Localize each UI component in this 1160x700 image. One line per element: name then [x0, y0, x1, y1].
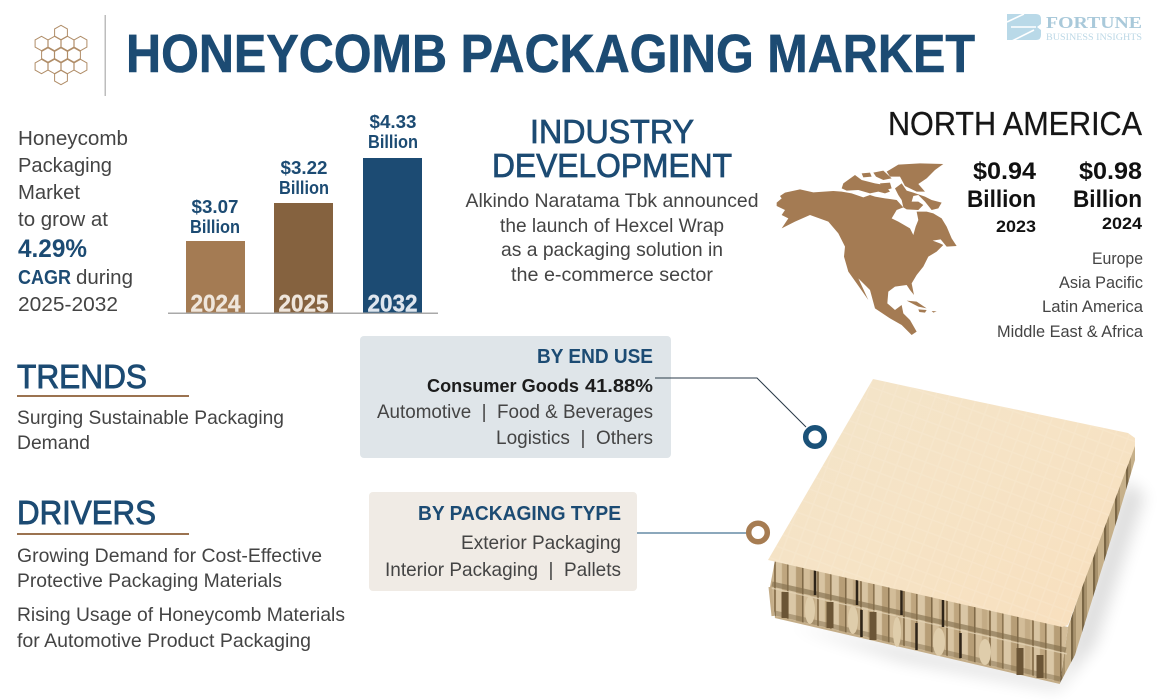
- panel: North America values: $0.94: [973, 158, 1037, 185]
- panel: drivers: Protective Packaging Materials: [17, 570, 282, 592]
- panel: North America values: [967, 158, 1143, 236]
- panel: drivers: [17, 494, 345, 652]
- panel: trends: Demand: [17, 432, 90, 454]
- list: other regions: Latin America: [1042, 298, 1144, 316]
- panel: by end use: Consumer Goods: [427, 375, 579, 396]
- connector: end use: [655, 378, 824, 446]
- panel: North America values: $0.98: [1079, 158, 1142, 185]
- connector: packaging type: [637, 523, 767, 542]
- panel: by packaging type: Exterior Packaging: [461, 532, 621, 554]
- map: North America: [777, 163, 957, 335]
- panel: drivers: for Automotive Product Packaging: [17, 630, 311, 652]
- panel: by end use: 41.88%: [585, 375, 653, 396]
- title: HONEYCOMB PACKAGING MARKET: [126, 24, 975, 84]
- panel: by end use: [360, 336, 671, 458]
- bar chart: market size: $4.33: [370, 111, 416, 132]
- list: other regions: Europe: [1092, 250, 1143, 268]
- panel: industry development: [466, 113, 758, 286]
- text block: CAGR summary: Market: [18, 181, 80, 204]
- panel: industry development: the e-commerce sector: [511, 264, 714, 286]
- panel: North America values: 2023: [996, 217, 1036, 236]
- logo: Fortune Business Insights: [1007, 13, 1142, 43]
- text block: CAGR summary: Honeycomb: [18, 127, 128, 150]
- panel: industry development: as a packaging solution in: [501, 239, 723, 261]
- illustration: honeycomb board: [768, 379, 1145, 690]
- text block: CAGR summary: [18, 127, 133, 316]
- bar chart: market size: 2025: [278, 290, 328, 318]
- panel: industry development: the launch of Hexcel Wrap: [500, 215, 724, 237]
- panel: by end use: BY END USE: [537, 346, 653, 368]
- panel: industry development: DEVELOPMENT: [492, 147, 732, 184]
- icon: honeycomb: [35, 25, 87, 85]
- panel: North America values: Billion: [1073, 186, 1142, 213]
- panel: by packaging type: BY PACKAGING TYPE: [418, 503, 621, 525]
- bar chart: market size: Billion: [368, 131, 418, 152]
- panel: by packaging type: Interior Packaging | Pallets: [385, 559, 621, 581]
- bar chart: market size: [168, 111, 438, 318]
- list: other regions: Asia Pacific: [1059, 274, 1143, 292]
- panel: North America values: 2024: [1102, 214, 1143, 233]
- panel: by end use: Automotive | Food & Beverages: [377, 401, 653, 423]
- text block: CAGR summary: 2025-2032: [18, 293, 118, 316]
- panel: drivers: Growing Demand for Cost-Effective: [17, 545, 322, 567]
- panel: by end use: Logistics | Others: [496, 427, 653, 449]
- panel: drivers: Rising Usage of Honeycomb Materials: [17, 604, 345, 626]
- panel: by packaging type: [369, 492, 637, 591]
- panel: trends: [17, 358, 284, 454]
- panel: trends: TRENDS: [17, 358, 147, 395]
- bar chart: market size: $3.07: [192, 196, 238, 217]
- panel: drivers: DRIVERS: [17, 494, 156, 531]
- bar chart: market size: Billion: [190, 216, 240, 237]
- logo: Fortune Business Insights: FORTUNE: [1046, 13, 1142, 32]
- text block: CAGR summary: 4.29%: [18, 235, 87, 263]
- heading: North America: NORTH AMERICA: [888, 105, 1142, 142]
- panel: North America values: Billion: [967, 186, 1036, 213]
- text block: CAGR summary: to grow at: [18, 208, 108, 231]
- list: other regions: [997, 250, 1144, 341]
- text block: CAGR summary: during: [76, 266, 133, 289]
- panel: industry development: Alkindo Naratama Tbk announced: [466, 190, 758, 212]
- text block: CAGR summary: Packaging: [18, 154, 112, 177]
- list: other regions: Middle East & Africa: [997, 323, 1144, 341]
- bar chart: market size: Billion: [279, 177, 329, 198]
- bar chart: market size: 2024: [190, 290, 241, 318]
- panel: industry development: INDUSTRY: [530, 113, 694, 150]
- logo: Fortune Business Insights: BUSINESS INSIGHTS: [1046, 33, 1142, 43]
- text block: CAGR summary: CAGR: [18, 266, 71, 289]
- bar chart: market size: 2032: [368, 290, 418, 318]
- bar chart: market size: $3.22: [280, 157, 328, 178]
- panel: trends: Surging Sustainable Packaging: [17, 407, 284, 429]
